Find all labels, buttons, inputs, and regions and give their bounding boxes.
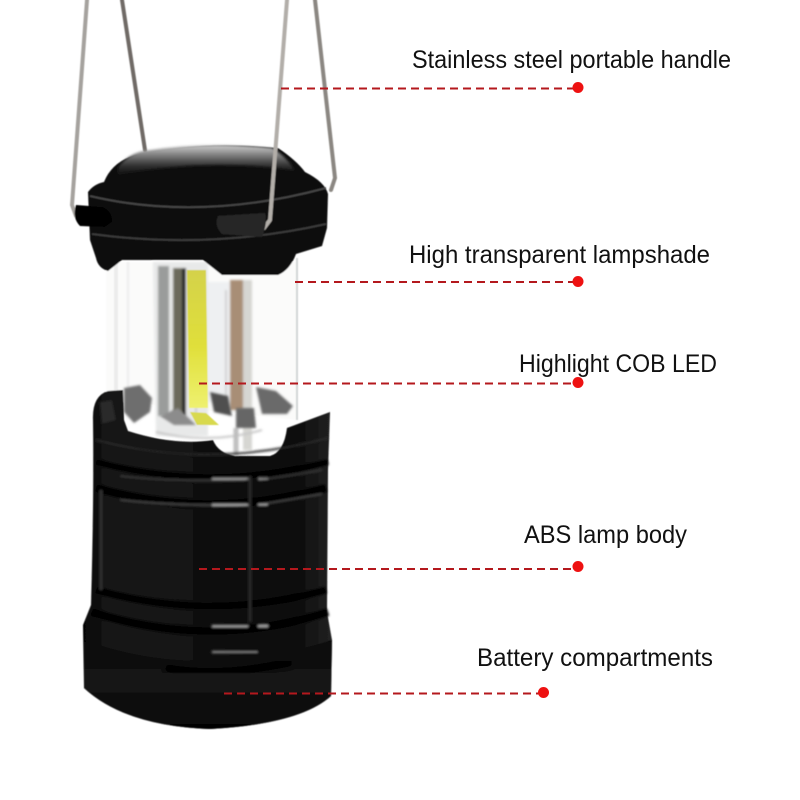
callout: high transparent lampshade: High transparent lampshade bbox=[409, 241, 710, 269]
body ribs bbox=[92, 438, 328, 652]
callout: ABS lamp body bbox=[199, 521, 687, 572]
left collar window bbox=[100, 400, 116, 424]
dome top highlight bbox=[118, 145, 294, 174]
battery compartment base bbox=[84, 640, 332, 729]
handle pivot right bbox=[217, 213, 266, 237]
cap rim lines bbox=[90, 188, 326, 207]
callout: ABS lamp body: ABS lamp body bbox=[524, 521, 687, 549]
lampshade base reflections bbox=[124, 385, 293, 455]
back handle wires bbox=[122, 0, 335, 190]
front handle wires bbox=[72, 0, 287, 228]
callout: battery compartments bbox=[224, 644, 713, 698]
lamp top cap bbox=[88, 145, 328, 275]
handle pivot left bbox=[75, 205, 112, 227]
callout: high transparent lampshade bbox=[295, 241, 710, 287]
lower lamp body bbox=[83, 390, 332, 729]
inner reflector column bbox=[153, 262, 252, 450]
lantern product illustration bbox=[72, 0, 335, 729]
callout: stainless steel portable handle bbox=[281, 46, 731, 93]
transparent lampshade bbox=[106, 258, 297, 455]
callout: highlight COB LED bbox=[199, 350, 717, 388]
COB LED strip bbox=[187, 270, 208, 408]
callout: highlight COB LED: Highlight COB LED bbox=[519, 350, 717, 378]
callout: battery compartments: Battery compartments bbox=[477, 644, 713, 672]
callout: stainless steel portable handle: Stainless steel portable handle bbox=[412, 46, 731, 74]
